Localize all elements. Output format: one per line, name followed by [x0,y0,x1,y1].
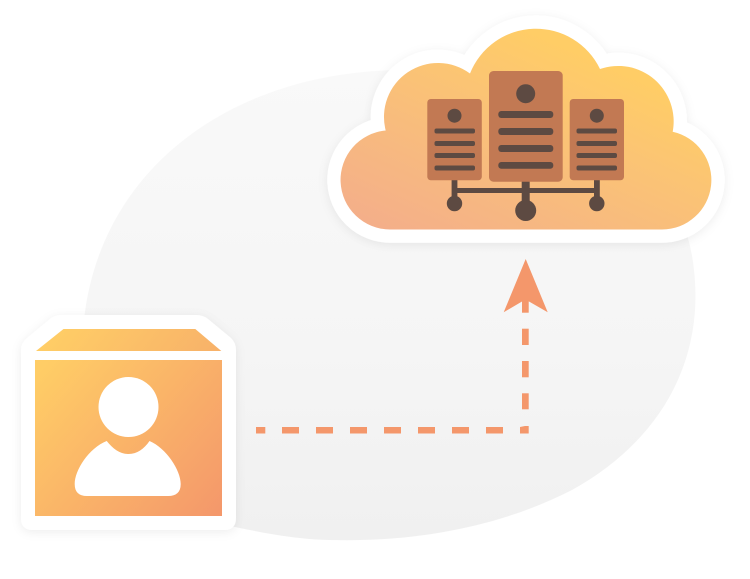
cloud outline [341,29,711,230]
dashed arrow path [256,297,529,434]
server centre [489,71,563,182]
user box [21,315,236,530]
server right [570,99,624,180]
server connectors [447,178,604,221]
box lid [36,329,221,351]
server left [427,99,482,180]
box face [35,360,222,516]
box outline [21,315,236,530]
cloud fill [341,29,711,230]
icon: user [75,377,181,496]
background blob [84,70,695,540]
arrowhead [504,259,548,312]
cloud with servers [341,29,711,230]
